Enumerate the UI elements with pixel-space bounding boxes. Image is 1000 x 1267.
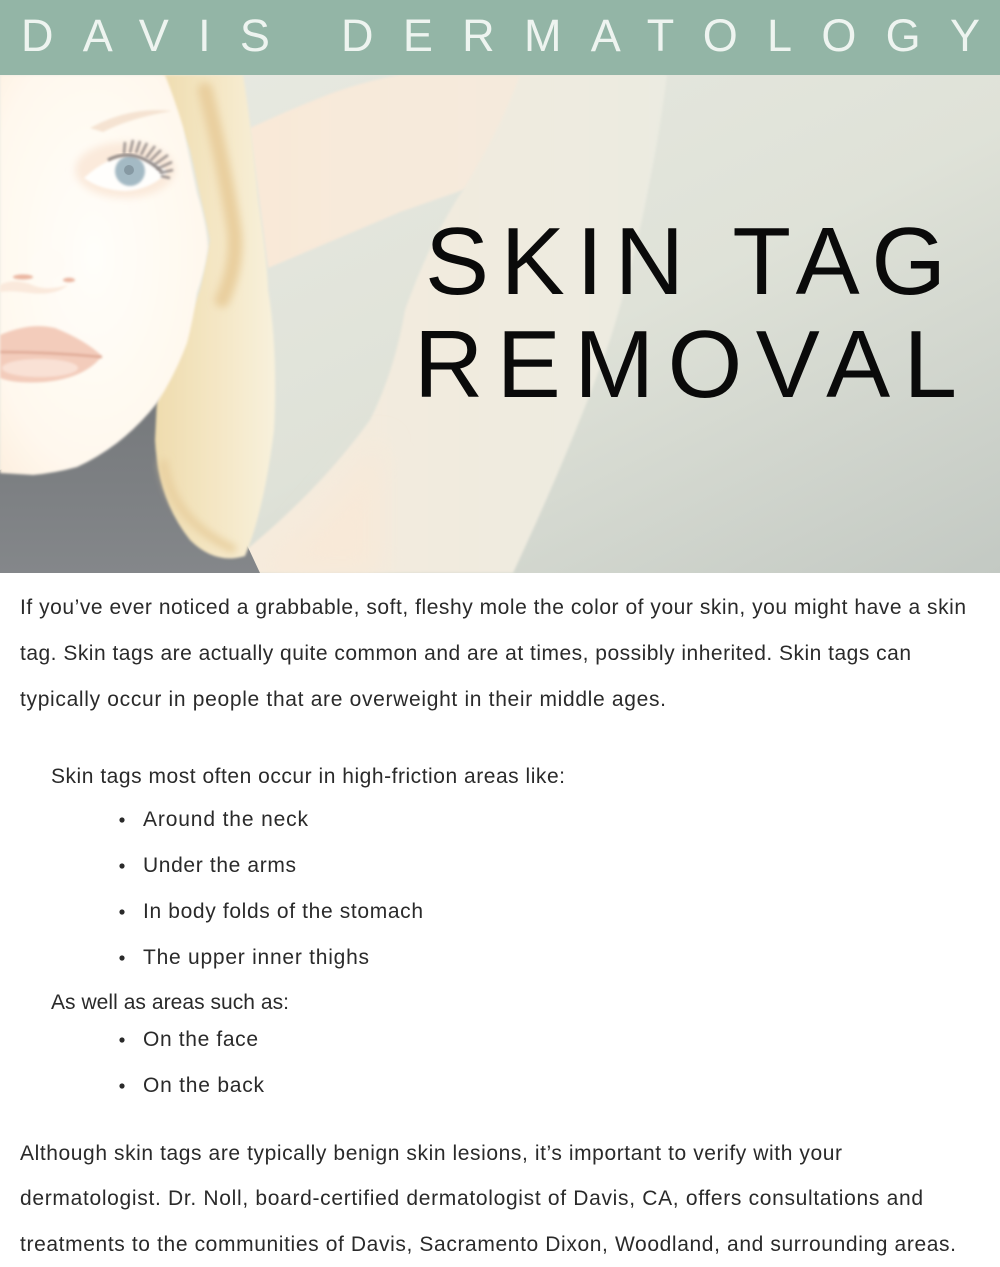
sweater <box>0 400 260 573</box>
closing paragraph: dermatologist. Dr. Noll, board-certified dermatologist of Davis, CA, offers consultations and <box>20 1187 923 1210</box>
brand name: DAVIS DERMATOLOGY <box>21 10 980 61</box>
title: SKIN TAG <box>425 208 946 315</box>
other areas list: As well as areas such as: <box>51 991 289 1014</box>
intro paragraph: tag. Skin tags are actually quite common and are at times, possibly inherited. Skin tags can <box>20 642 911 665</box>
header banner <box>0 0 1000 75</box>
raised forearm <box>251 75 520 268</box>
intro paragraph: typically occur in people that are overweight in their middle ages. <box>20 688 666 711</box>
eye <box>75 140 175 198</box>
eyebrow <box>90 110 172 132</box>
closing paragraph: Although skin tags are typically benign skin lesions, it’s important to verify with your <box>20 1142 842 1165</box>
other areas list: On the face <box>143 1028 258 1051</box>
high-friction areas list: Around the neck <box>143 808 308 831</box>
arm shadow tone <box>354 572 355 573</box>
closing paragraph <box>20 1142 956 1256</box>
intro paragraph <box>20 596 966 711</box>
upper arm <box>236 75 667 573</box>
face <box>0 75 208 475</box>
title: REMOVAL <box>414 311 957 418</box>
lips <box>0 326 102 382</box>
high-friction areas list: Skin tags most often occur in high-friction areas like: <box>51 765 565 788</box>
hero photo: woman with raised arm <box>0 75 1000 573</box>
hair streaks <box>205 90 235 300</box>
title <box>414 208 957 418</box>
high-friction areas list: The upper inner thighs <box>143 946 369 969</box>
intro paragraph: If you’ve ever noticed a grabbable, soft, fleshy mole the color of your skin, you might have a skin <box>20 596 966 619</box>
other areas list <box>51 991 289 1097</box>
high-friction areas list: Under the arms <box>143 854 296 877</box>
high-friction areas list <box>51 765 565 969</box>
nose <box>0 273 76 294</box>
closing paragraph: treatments to the communities of Davis, Sacramento Dixon, Woodland, and surrounding areas. <box>20 1233 956 1256</box>
high-friction areas list: In body folds of the stomach <box>143 900 423 923</box>
hair <box>155 75 275 558</box>
eyelashes <box>124 140 173 178</box>
other areas list: On the back <box>143 1074 264 1097</box>
